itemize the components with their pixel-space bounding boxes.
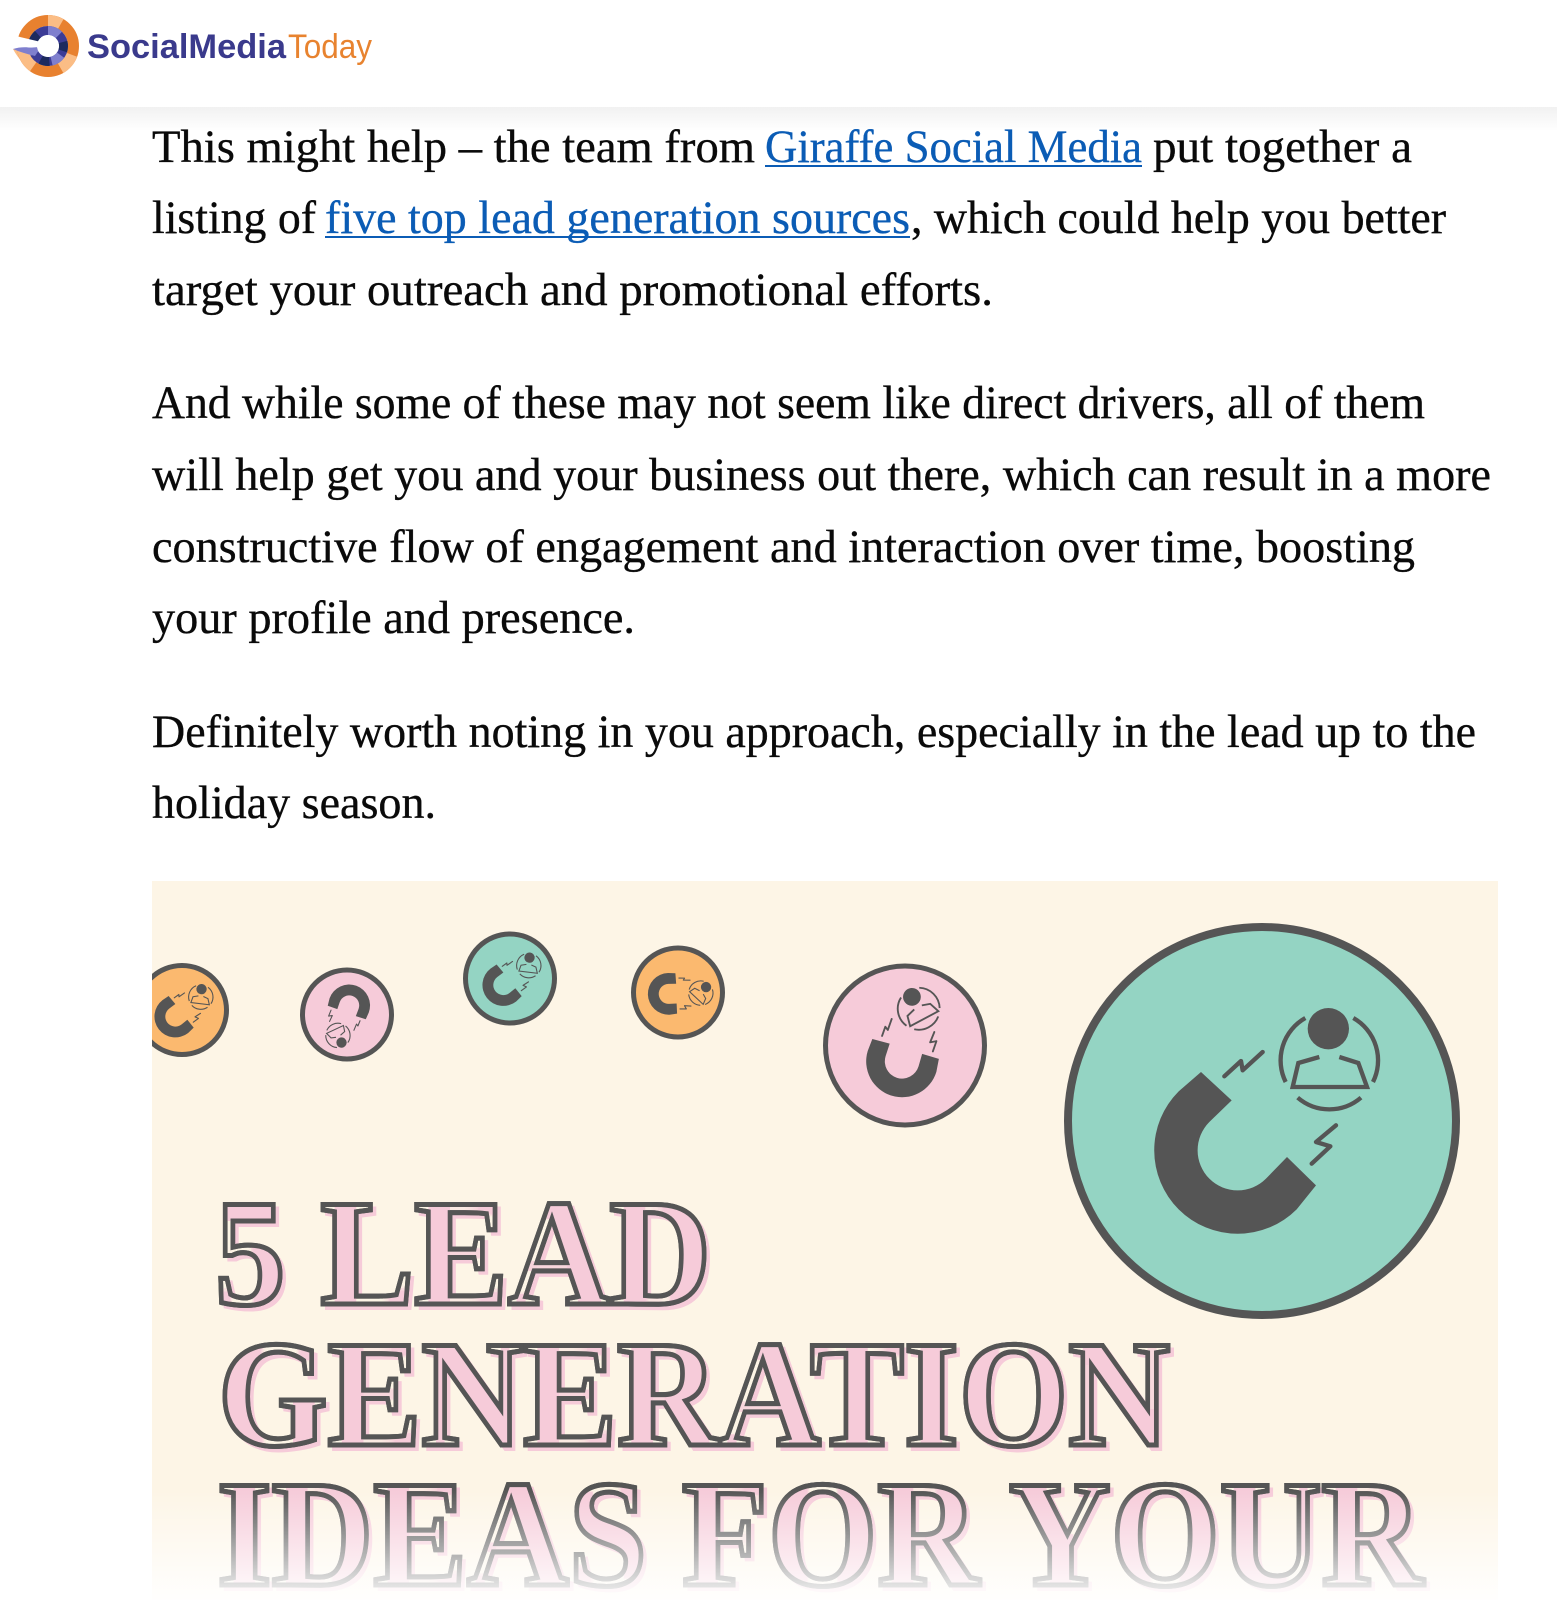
icon: pink magnet badge large [826,966,984,1125]
logo wordmark: Today [288,28,372,66]
paragraph 1 [152,121,1446,316]
header bar [0,0,1557,131]
paragraph 2 [152,377,1491,644]
paragraph 1: , which could help you better [911,192,1446,244]
paragraph 1: Giraffe Social Media [765,121,1142,173]
paragraph 2: constructive flow of engagement and interaction over time, boosting [152,521,1415,573]
title letter bodies: 5 LEAD [215,1169,711,1337]
title outline [215,1169,1425,1600]
icon: teal magnet badge main [1068,927,1456,1315]
paragraph 1: listing of [152,192,316,244]
paragraph 1: This might help – the team from [152,121,755,173]
title shadow [219,1173,1429,1600]
icon: pink magnet badge 1 [302,970,392,1059]
title pink stems: GENERATION [218,1310,1170,1478]
title letter bodies: GENERATION [218,1310,1170,1478]
icon: orange magnet badge 1 [138,966,226,1054]
icon: orange magnet badge 2 [634,948,722,1037]
title pink stems [215,1169,1425,1600]
paragraph 3 [152,706,1476,829]
icon: teal magnet badge small [466,934,554,1023]
title shadow: GENERATION [222,1314,1174,1482]
title pink stems: 5 LEAD [215,1169,711,1337]
title outline: 5 LEAD [215,1169,711,1337]
infographic panel [138,881,1498,1600]
title [215,1169,1429,1600]
logo wordmark [87,28,372,66]
title shadow: 5 LEAD [219,1173,715,1341]
paragraph 2: And while some of these may not seem like direct drivers, all of them [152,377,1425,429]
paragraph 3: Definitely worth noting in you approach, especially in the lead up to the [152,706,1476,758]
paragraph 2: will help get you and your business out there, which can result in a more [152,449,1491,501]
title letter bodies [215,1169,1425,1600]
title outline: GENERATION [218,1310,1170,1478]
paragraph 3: holiday season. [152,777,436,829]
logo wordmark: SocialMedia [87,28,287,66]
paragraph 1: put together a [1153,121,1412,173]
paragraph 2: your profile and presence. [152,592,635,644]
paragraph 1: five top lead generation sources [325,192,910,244]
paragraph 1: target your outreach and promotional efforts. [152,264,993,316]
logo mark [10,20,74,72]
